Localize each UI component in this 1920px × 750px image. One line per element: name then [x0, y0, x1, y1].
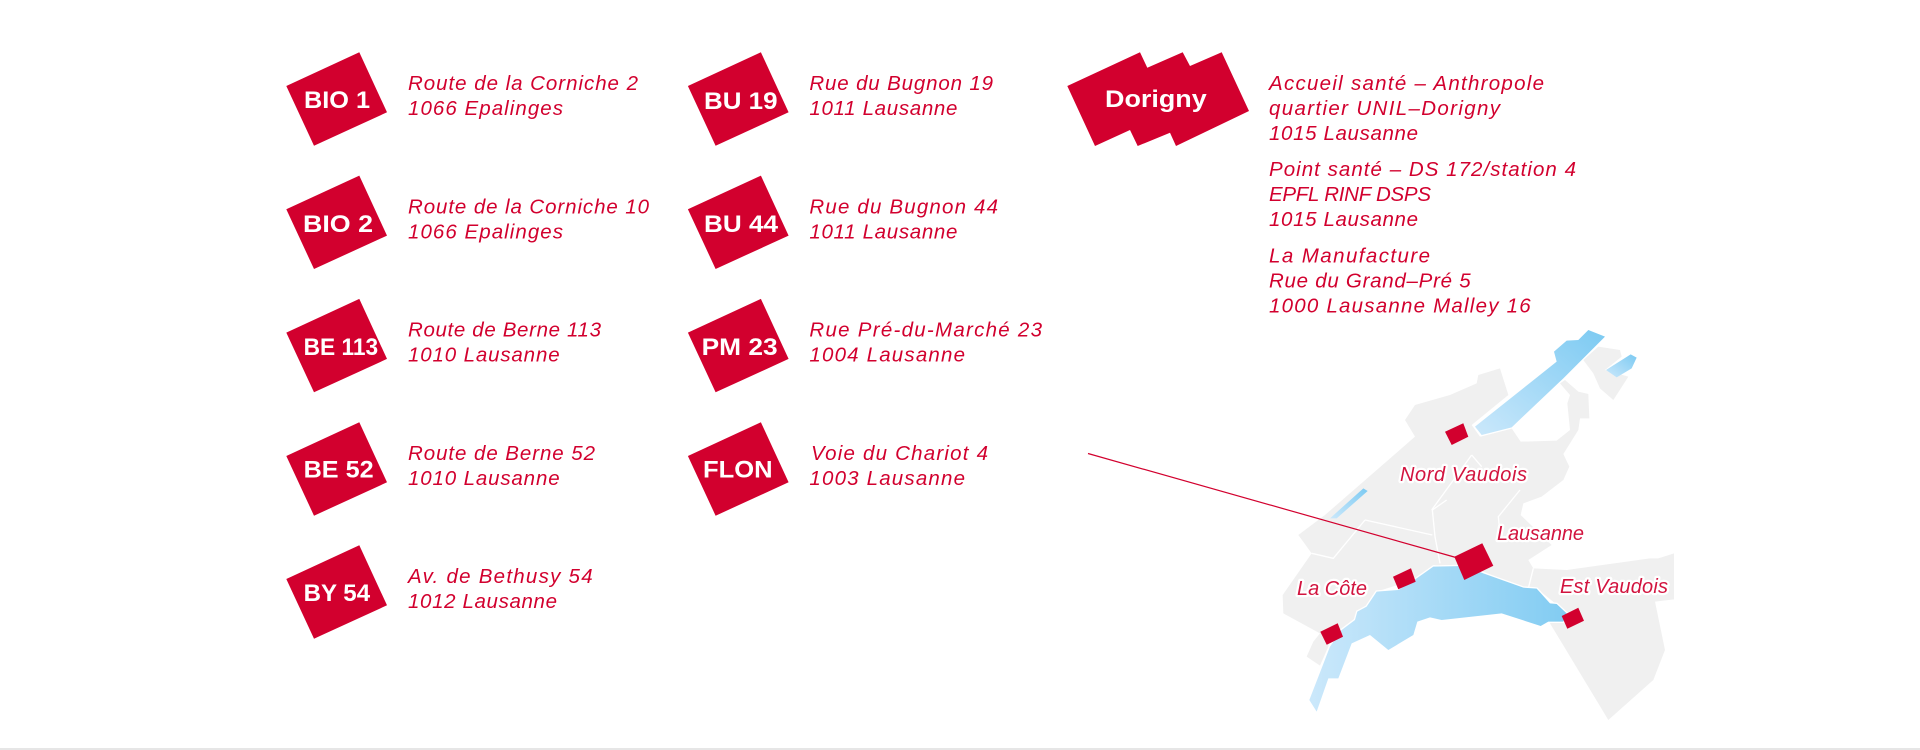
badge: BU 44: [688, 176, 789, 269]
badge: FLON: [688, 422, 789, 516]
address: Point santé: 1015 Lausanne: [1269, 208, 1418, 231]
map of the canton: [1088, 330, 1674, 720]
map label: La Côte: La Côte: [1297, 578, 1367, 600]
address: La Manufacture: [1269, 245, 1531, 318]
address: BE 52: Route de Berne 52: [408, 442, 596, 465]
address: Point santé: Point santé – DS 172/station 4: [1269, 158, 1576, 181]
badge: PM 23: [688, 299, 789, 392]
map: location markers: [1320, 423, 1584, 645]
address: BIO 2: Route de la Corniche 10: [408, 195, 650, 218]
address: BE 52: [408, 442, 596, 490]
address: La Manufacture: Rue du Grand–Pré 5: [1269, 270, 1471, 293]
address: BU 19: [809, 72, 993, 120]
badge: PM 23: PM 23: [702, 334, 778, 361]
address: BIO 1: Route de la Corniche 2: [408, 72, 639, 95]
address: BE 113: Route de Berne 113: [408, 319, 602, 342]
map: lakes: [1309, 330, 1637, 712]
address: BY 54: Av. de Bethusy 54: [406, 565, 593, 588]
address: BU 44: [809, 195, 998, 243]
badge: BU 44: BU 44: [704, 211, 778, 238]
address: Accueil santé: 1015 Lausanne: [1269, 122, 1418, 145]
address: La Manufacture: La Manufacture: [1269, 245, 1430, 268]
address: FLON: 1003 Lausanne: [809, 467, 965, 490]
address: BE 113: [408, 319, 602, 367]
address: Accueil santé: quartier UNIL–Dorigny: [1269, 97, 1502, 120]
address: BY 54: [406, 565, 593, 613]
address: BE 52: 1010 Lausanne: [408, 467, 560, 490]
badge: BE 52: BE 52: [304, 456, 374, 484]
address: BE 113: 1010 Lausanne: [408, 344, 560, 367]
address: BIO 2: [408, 195, 650, 243]
badge: BE 52: [286, 422, 387, 516]
address: PM 23: Rue Pré-du-Marché 23: [809, 319, 1043, 342]
address: FLON: Voie du Chariot 4: [811, 442, 988, 465]
address: BY 54: 1012 Lausanne: [408, 590, 557, 613]
address: FLON: [809, 442, 988, 490]
address: PM 23: 1004 Lausanne: [809, 344, 965, 367]
badge: FLON: FLON: [703, 456, 773, 484]
badge: BE 113: [286, 299, 387, 392]
badge: BU 19: BU 19: [704, 88, 778, 115]
address: Point santé: [1269, 158, 1576, 231]
map: land regions: [1283, 347, 1674, 720]
address: Accueil santé: [1267, 72, 1544, 145]
badge: BY 54: BY 54: [304, 580, 370, 607]
map label: Est Vaudois: Est Vaudois: [1560, 576, 1668, 598]
address: BU 19: Rue du Bugnon 19: [809, 72, 993, 95]
address: BU 44: 1011 Lausanne: [809, 220, 957, 243]
badge: Dorigny: [1067, 52, 1249, 146]
badge: BY 54: [286, 545, 387, 639]
address: La Manufacture: 1000 Lausanne Malley 16: [1269, 295, 1531, 318]
badge: BIO 2: BIO 2: [303, 211, 373, 238]
address: BIO 2: 1066 Epalinges: [408, 220, 563, 243]
address: PM 23: [809, 319, 1043, 367]
address: BIO 1: 1066 Epalinges: [408, 97, 563, 120]
badge: Dorigny: Dorigny: [1105, 86, 1207, 113]
address: BU 44: Rue du Bugnon 44: [809, 195, 998, 218]
badge: BIO 2: [286, 176, 387, 269]
badge: BIO 1: BIO 1: [304, 87, 370, 114]
map label: Lausanne: Lausanne: [1497, 523, 1584, 545]
map: connector line: [1088, 454, 1456, 558]
badge: BE 113: BE 113: [304, 334, 378, 361]
address: BIO 1: [408, 72, 639, 120]
address: Accueil santé: Accueil santé – Anthropole: [1267, 72, 1544, 95]
badge: BIO 1: [286, 52, 387, 146]
address: BU 19: 1011 Lausanne: [809, 97, 957, 120]
badge: BU 19: [688, 52, 789, 146]
bottom rule: [0, 748, 1920, 750]
map label: Nord Vaudois: Nord Vaudois: [1400, 464, 1527, 486]
address: Point santé: EPFL RINF DSPS: [1269, 183, 1431, 206]
